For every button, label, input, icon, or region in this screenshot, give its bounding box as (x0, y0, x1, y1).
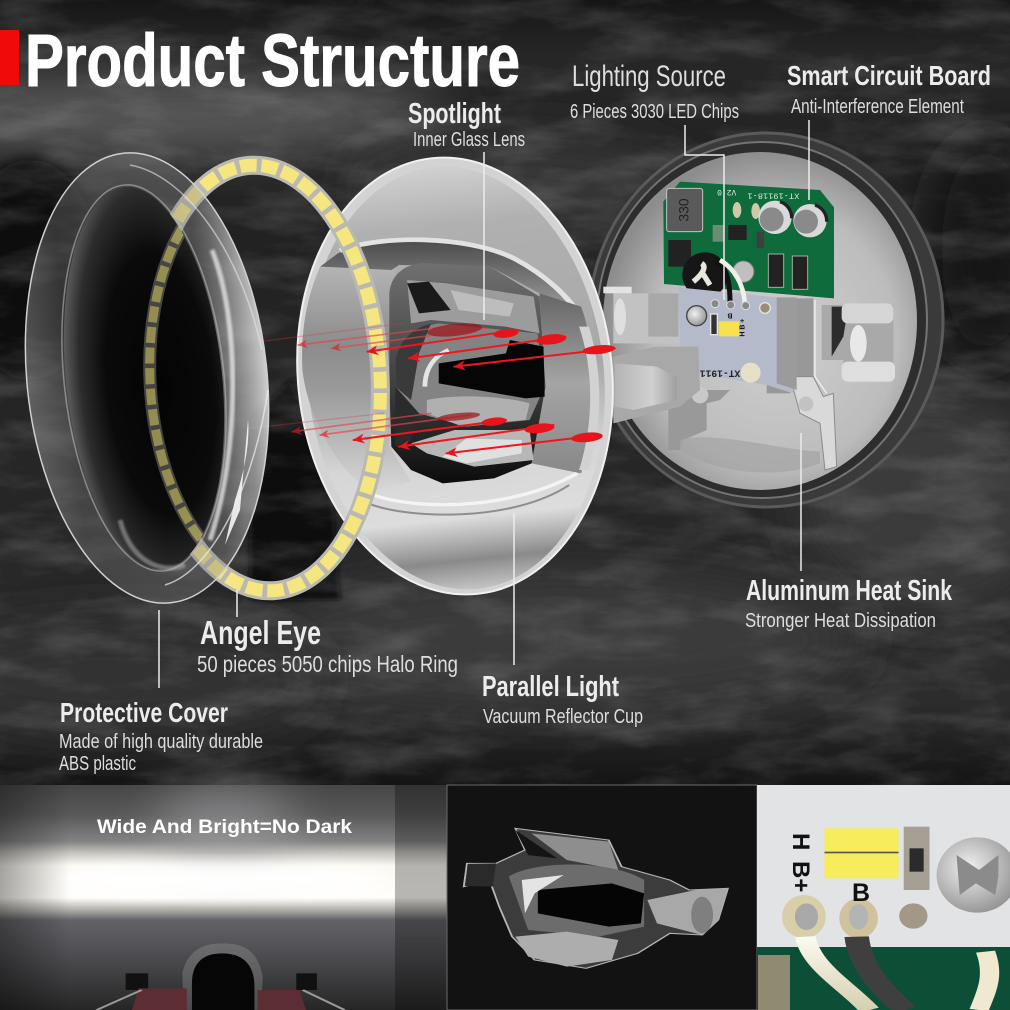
heat sink assembly (589, 133, 943, 507)
label: protective cover: Made of high quality durable (59, 731, 263, 753)
white LED board: H B + (740, 319, 747, 337)
label: lighting source: Lighting Source (572, 60, 726, 93)
label: angel eye: 50 pieces 5050 chips Halo Ring (197, 651, 458, 677)
green smart circuit board: XT-19118-1 (747, 190, 799, 200)
heat sink light interior (603, 152, 917, 490)
board markings: H (787, 833, 814, 850)
angel eye halo ring (133, 159, 391, 597)
board markings: B+ (787, 861, 814, 892)
title: Product Structure (25, 19, 520, 102)
panel: beam pattern photo (0, 785, 447, 1010)
caption: Wide And Bright=No Dark (97, 817, 352, 838)
lens stem passing through reflector (603, 287, 700, 423)
heat sink outer glass ring (589, 133, 943, 507)
label: spotlight: Inner Glass Lens (413, 129, 525, 151)
label: parallel light: Parallel Light (482, 671, 619, 703)
spotlight inner glass lens (395, 280, 545, 467)
label: protective cover (59, 697, 263, 775)
label: spotlight: Spotlight (408, 98, 501, 130)
label: aluminum heat sink (745, 575, 953, 632)
red light-path arrows (249, 321, 616, 453)
label: smart circuit board (787, 60, 991, 118)
reflector top wedge (320, 239, 585, 337)
leader lines (159, 120, 809, 688)
label: parallel light: Vacuum Reflector Cup (483, 706, 643, 728)
LED chip close-up (824, 828, 899, 878)
label: parallel light (482, 671, 643, 728)
background: dark mountain landscape (0, 0, 1010, 785)
lens body (464, 828, 728, 968)
parallel light reflector cup (276, 142, 634, 610)
wires close-up (805, 937, 990, 1010)
red accent bar (0, 30, 19, 85)
green smart circuit board (663, 182, 834, 298)
lens window (389, 263, 545, 483)
screw (937, 837, 1010, 913)
solder pads (782, 895, 928, 938)
panel: LED board close-up photo (757, 785, 1010, 1010)
inductor 330 (667, 188, 703, 232)
label: angel eye (197, 614, 458, 677)
lamp silhouette (97, 943, 345, 1010)
label: lighting source (570, 60, 739, 123)
reflector lower ridge (366, 473, 577, 505)
metal bracket (613, 293, 895, 473)
label: spotlight (408, 98, 525, 151)
wires (715, 260, 745, 303)
ring seen through lens (143, 224, 204, 544)
inductor 330: 330 (675, 198, 691, 222)
label: lighting source: 6 Pieces 3030 LED Chips (570, 101, 739, 123)
green smart circuit board: V2.0 (717, 187, 736, 196)
label: protective cover: Protective Cover (60, 697, 228, 728)
label: protective cover: ABS plastic (59, 753, 136, 775)
label: aluminum heat sink: Stronger Heat Dissipation (745, 610, 936, 632)
board markings: B (852, 879, 870, 907)
reflector right panel (532, 293, 593, 473)
white LED board: XT-1911 (700, 368, 740, 379)
reflector left panel (302, 267, 411, 492)
panel: glass lens photo (447, 785, 757, 1010)
label: angel eye: Angel Eye (200, 614, 321, 651)
LED chip (719, 321, 739, 336)
white LED board (678, 260, 797, 393)
protective cover lens (24, 152, 270, 604)
resistor (904, 827, 929, 890)
white LED board: B (727, 312, 733, 319)
capacitors (758, 201, 827, 237)
board markings (787, 833, 870, 907)
